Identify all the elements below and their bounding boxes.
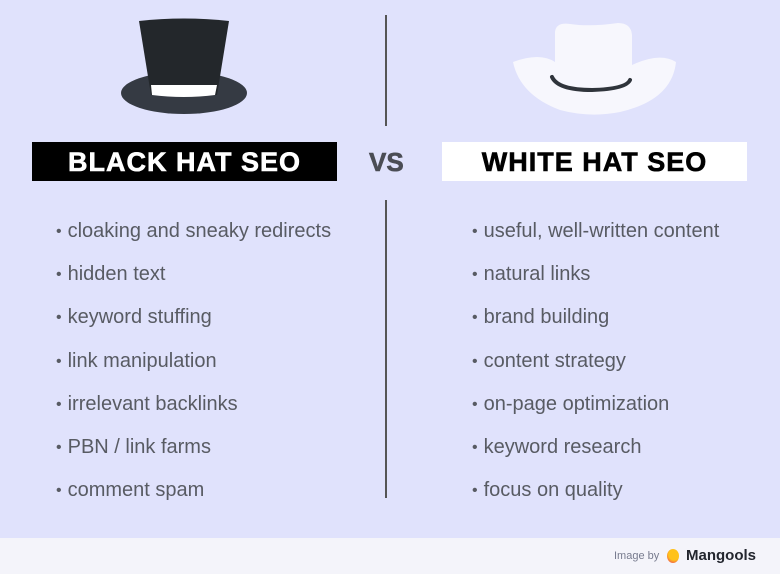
footer <box>0 538 780 574</box>
icon: black top hat <box>121 18 247 114</box>
footer credit: Image by <box>614 550 659 562</box>
list: white hat techniques: on-page optimization <box>484 393 669 415</box>
heading: white hat seo: WHITE HAT SEO <box>482 147 707 177</box>
list: white hat techniques: brand building <box>484 306 609 328</box>
list: black hat techniques: hidden text <box>68 263 165 285</box>
heading: vs: VS <box>369 147 404 177</box>
heading: black hat seo <box>32 142 337 181</box>
list: white hat techniques: keyword research <box>484 436 641 458</box>
footer credit <box>614 547 756 564</box>
divider bottom <box>385 200 387 498</box>
list: white hat techniques: content strategy <box>484 350 626 372</box>
list: black hat techniques: keyword stuffing <box>68 306 212 328</box>
heading: white hat seo <box>442 142 747 181</box>
list: black hat techniques: comment spam <box>68 479 204 501</box>
list: black hat techniques: PBN / link farms <box>68 436 211 458</box>
heading: black hat seo: BLACK HAT SEO <box>68 147 301 177</box>
list: black hat techniques: link manipulation <box>68 350 217 372</box>
list: white hat techniques: useful, well-written content <box>484 220 719 242</box>
list: white hat techniques: natural links <box>484 263 590 285</box>
icon: white cowboy hat <box>513 23 676 114</box>
list: black hat techniques: cloaking and sneaky redirects <box>68 220 331 242</box>
list: black hat techniques <box>56 220 331 501</box>
icon: mangools logo <box>667 549 679 563</box>
list: white hat techniques: focus on quality <box>484 479 623 501</box>
list: white hat techniques <box>472 220 720 501</box>
list: black hat techniques: irrelevant backlinks <box>68 393 238 415</box>
footer credit: Mangools <box>686 547 756 564</box>
divider top <box>385 15 387 126</box>
